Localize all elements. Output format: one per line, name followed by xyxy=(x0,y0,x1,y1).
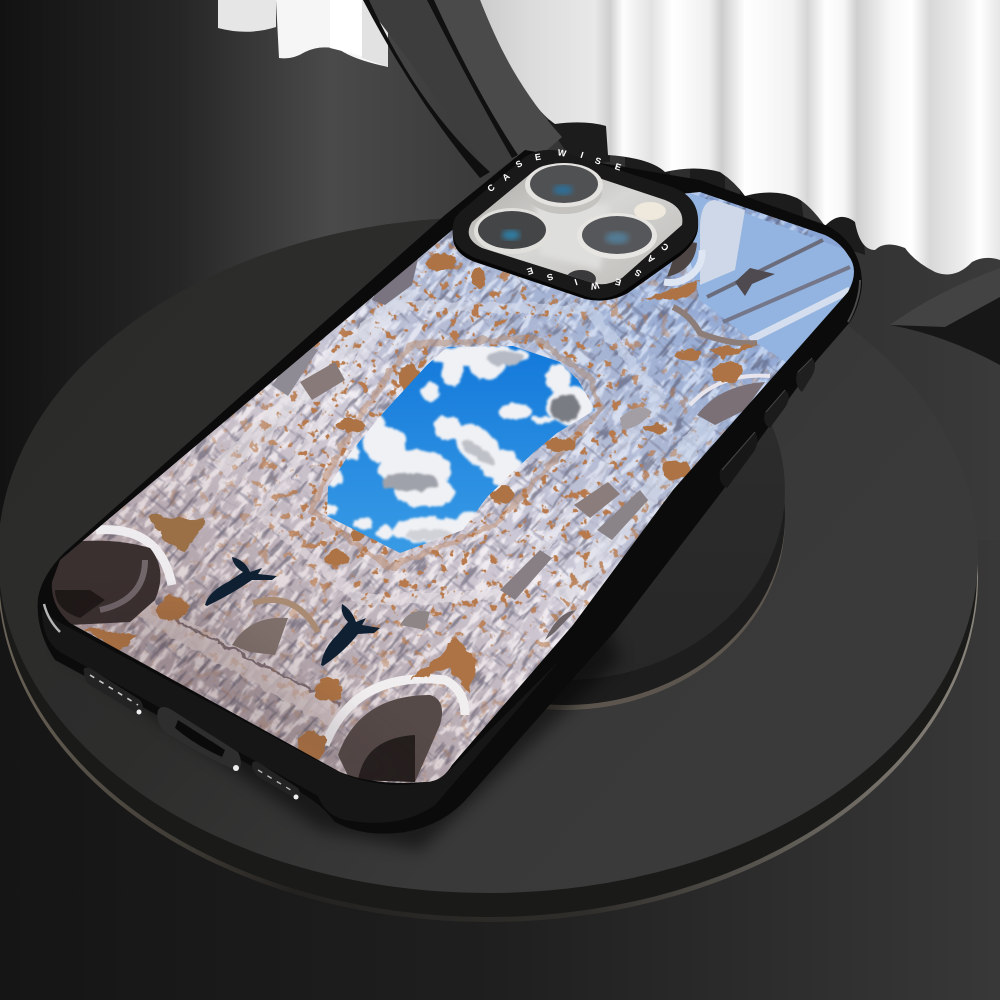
charging port xyxy=(157,707,241,771)
wedge object right xyxy=(890,268,1000,365)
ornament highlights xyxy=(74,192,818,783)
wall panels xyxy=(272,345,652,600)
brand text CASEWISE bottom: E xyxy=(526,265,534,277)
brand text CASEWISE bottom: C xyxy=(659,241,671,253)
gold ornament masses xyxy=(83,253,758,759)
small round platform xyxy=(345,300,785,710)
flash xyxy=(634,202,666,220)
sky opening xyxy=(327,346,595,553)
brand text CASEWISE top: A xyxy=(500,171,512,183)
brand text CASEWISE bottom: A xyxy=(645,253,657,265)
lidar sensor xyxy=(568,270,596,284)
brand text CASEWISE top: W xyxy=(557,147,568,159)
speaker port left xyxy=(84,668,143,715)
curtain left xyxy=(218,0,388,67)
side buttons xyxy=(720,358,815,488)
brand text CASEWISE bottom: S xyxy=(546,271,554,283)
brand text CASEWISE top: I xyxy=(579,150,585,160)
large round platform xyxy=(0,217,978,922)
phone shadow xyxy=(60,500,620,850)
speaker port right xyxy=(252,761,300,800)
camera glass xyxy=(468,164,682,284)
brand text CASEWISE top: S xyxy=(594,155,602,167)
sky xyxy=(327,346,595,553)
brand text CASEWISE top: C xyxy=(485,182,497,194)
artwork shading xyxy=(90,592,408,782)
brand text CASEWISE top: S xyxy=(514,158,524,170)
brand text CASEWISE bottom: S xyxy=(633,267,643,279)
artwork base xyxy=(73,192,844,783)
lens top xyxy=(525,163,603,214)
brand text CASEWISE bottom xyxy=(526,241,671,292)
phone case body xyxy=(38,150,862,834)
icon: bird left xyxy=(205,557,277,606)
arches xyxy=(50,376,770,782)
ornament shadows crossing xyxy=(88,194,804,783)
lens left xyxy=(474,208,550,254)
camera bump xyxy=(452,147,698,301)
icon: bird right xyxy=(321,604,380,666)
ceiling frames xyxy=(130,290,720,720)
bottom ports xyxy=(84,668,300,800)
clouds xyxy=(323,345,594,543)
lens right xyxy=(577,213,657,259)
brand text CASEWISE top xyxy=(485,147,622,194)
brand text CASEWISE bottom: W xyxy=(589,280,600,292)
phone case printed artwork xyxy=(52,192,854,783)
shadows under curtain xyxy=(545,120,865,255)
arch stand xyxy=(363,0,562,178)
ornament shadows xyxy=(74,195,813,783)
brand text CASEWISE top: E xyxy=(614,161,622,173)
top right blue section xyxy=(664,193,860,365)
brand text CASEWISE bottom: E xyxy=(614,276,622,288)
colour tint xyxy=(74,192,844,783)
gold texture xyxy=(80,200,844,783)
camera ring xyxy=(453,153,698,301)
curtain right xyxy=(480,0,1000,290)
brand text CASEWISE top: E xyxy=(534,152,542,162)
brand text CASEWISE bottom: I xyxy=(573,277,579,287)
top left arch xyxy=(372,258,418,305)
